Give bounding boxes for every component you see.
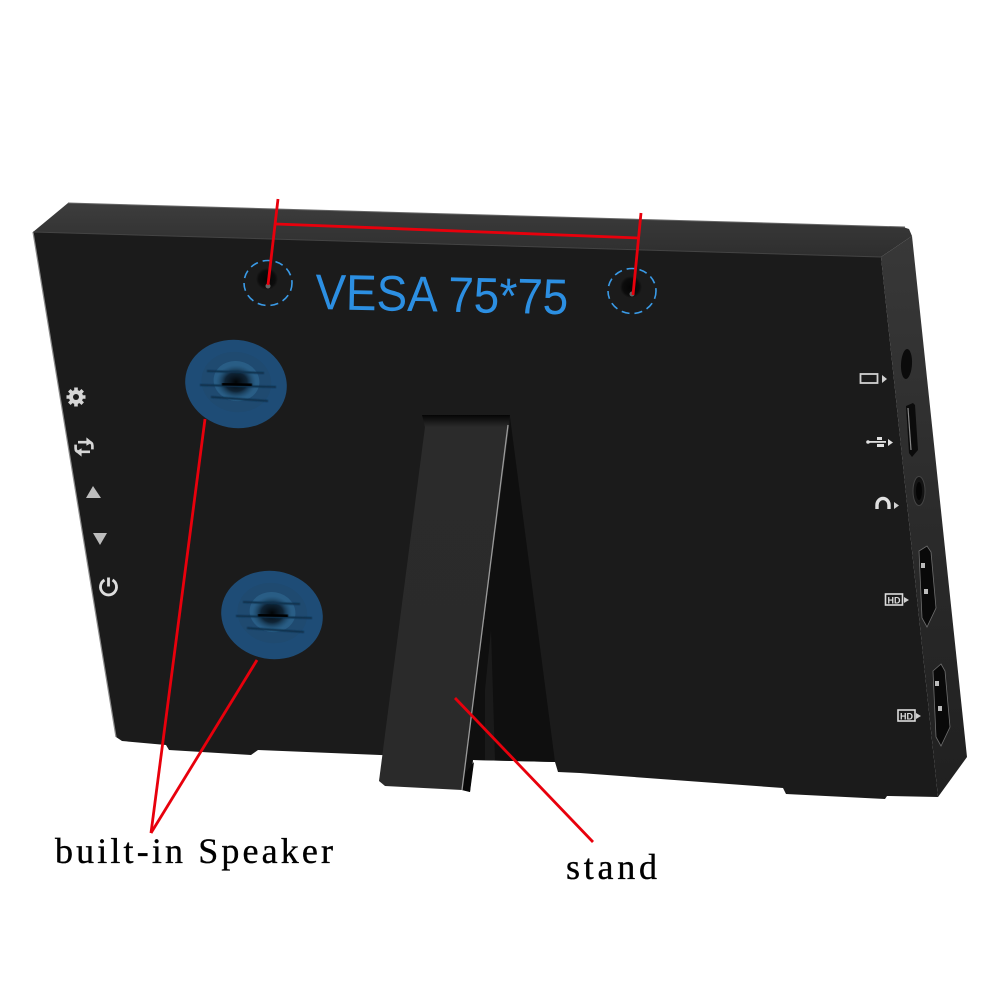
monitor body: [33, 203, 967, 799]
port: audio jack: [913, 476, 925, 506]
port icons: [860, 374, 921, 722]
vesa label: VESA 75*75: [315, 264, 569, 325]
icon: usb: [866, 437, 893, 447]
back panel: [33, 232, 938, 799]
vesa mount holes: [244, 260, 656, 314]
vesa hole right: [608, 268, 656, 314]
stand recess: [422, 415, 510, 427]
icon: input switch arrows: [76, 437, 92, 457]
side ports: [900, 349, 950, 746]
port: hdmi lower: [933, 664, 950, 746]
port: power jack: [900, 349, 913, 379]
speaker lower: [214, 563, 330, 667]
stand plate: [379, 427, 509, 790]
vesa bracket: [268, 199, 641, 295]
port: micro usb: [906, 403, 918, 457]
vesa hole left: [244, 260, 292, 306]
label: built-in speaker: built-in Speaker: [55, 831, 333, 871]
icon: headphones: [877, 498, 899, 509]
icon: power: [100, 578, 116, 595]
icon: up triangle: [86, 486, 101, 498]
icon: settings gear: [66, 388, 86, 406]
icon: hd lower: [898, 710, 921, 722]
red callout lines: [151, 199, 641, 842]
top bevel: [33, 203, 912, 257]
port: hdmi upper: [919, 546, 936, 627]
icon: hd lower: HD: [900, 712, 913, 722]
stand: [379, 415, 555, 792]
stand leader line: [455, 698, 593, 842]
icon: hd upper: [886, 594, 909, 606]
stand shadow: [462, 417, 555, 792]
icon: hd upper: HD: [888, 596, 901, 606]
speaker leader lines: [151, 419, 257, 833]
speaker upper: [178, 332, 294, 436]
icon: dc power: [860, 374, 887, 383]
right side bevel: [881, 236, 967, 797]
label: stand: stand: [566, 847, 657, 887]
icon: down triangle: [93, 533, 107, 545]
button icons: [66, 388, 116, 595]
